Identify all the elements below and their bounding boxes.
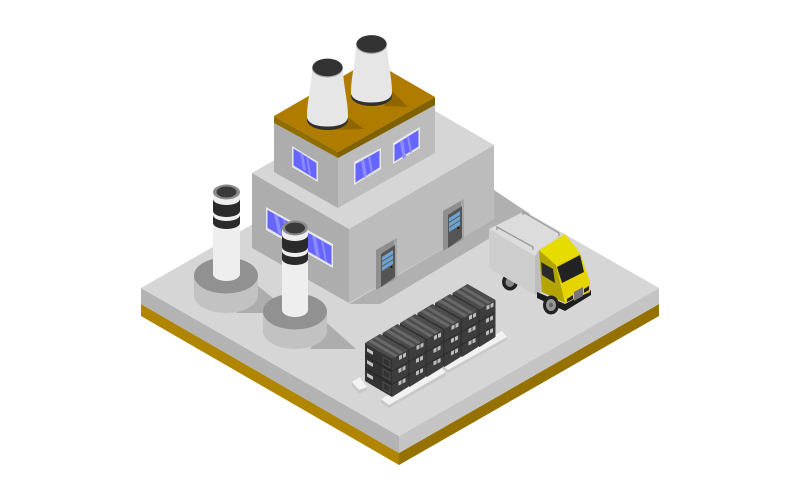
cargo box (489, 212, 560, 295)
front wheel (543, 296, 559, 314)
server racks (365, 284, 496, 397)
roof (274, 60, 435, 158)
roof tower left (307, 58, 348, 130)
roof tower right (351, 35, 392, 106)
left smokestack (194, 184, 258, 313)
upper building block (274, 105, 435, 208)
right smokestack (263, 220, 327, 349)
truck (489, 212, 591, 314)
door: front (376, 238, 397, 290)
rack front panel details (367, 348, 390, 393)
lower building block (252, 89, 494, 303)
lower left window (266, 207, 333, 268)
stack shadows (236, 286, 356, 349)
roof tower shadows (328, 91, 408, 130)
upper windows (292, 127, 420, 185)
cab (539, 234, 590, 303)
door: side (443, 199, 464, 251)
building ground shadow (349, 190, 530, 304)
platform base (141, 140, 659, 465)
bumper and chassis (537, 290, 591, 311)
pallets (352, 331, 507, 408)
rear wheel (502, 274, 518, 290)
